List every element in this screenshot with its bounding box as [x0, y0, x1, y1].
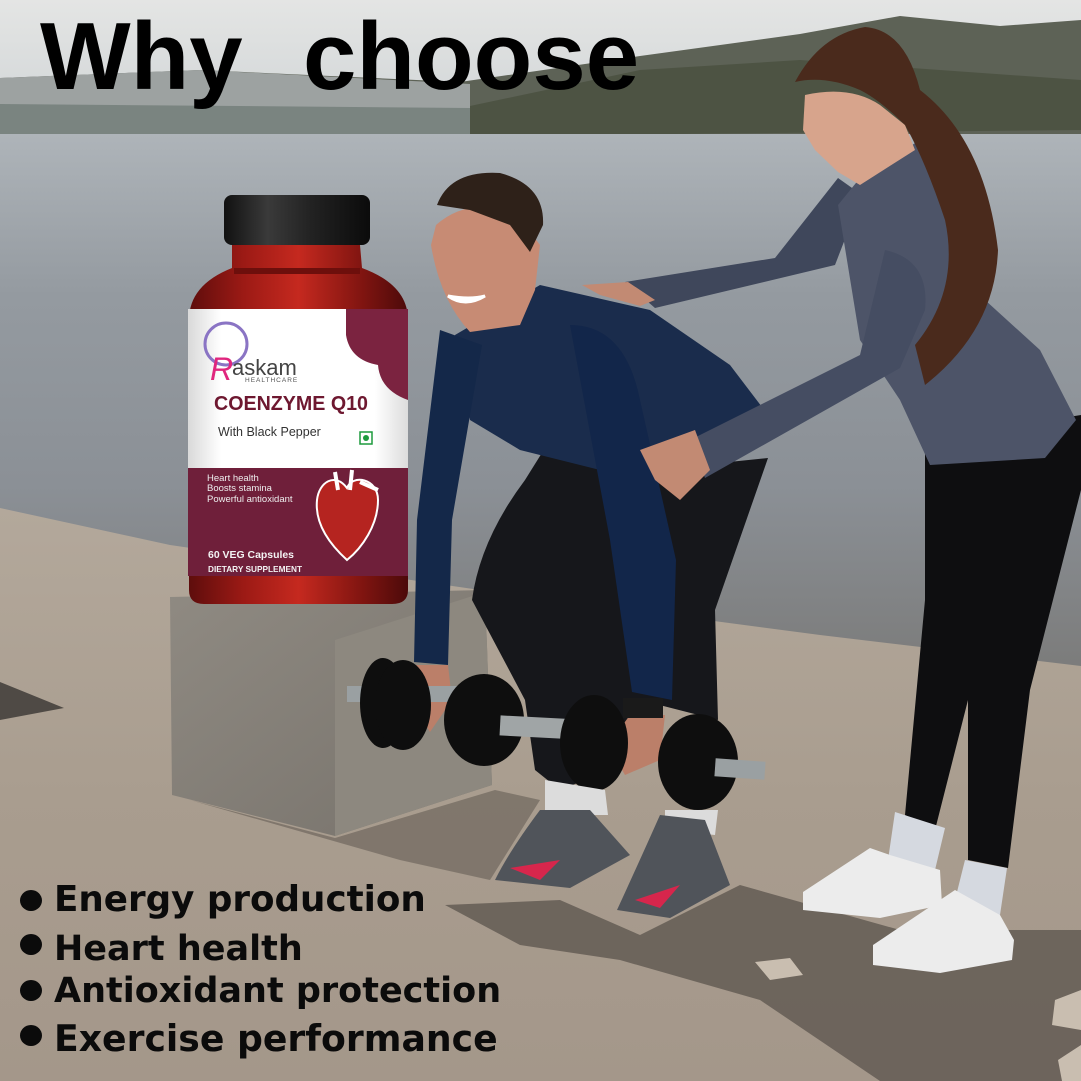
man hands: [410, 665, 665, 775]
man hair: [437, 173, 543, 252]
concrete block: [170, 590, 492, 836]
veg mark: [360, 432, 372, 444]
product bottle: [188, 195, 408, 604]
benefits on label: Powerful antioxidant: [207, 494, 293, 505]
icon: heart: [317, 470, 378, 560]
bottle body: [189, 245, 408, 604]
brand subline: HEALTHCARE: [245, 377, 298, 384]
bottle cap: [224, 195, 370, 245]
dumbbells: [347, 658, 766, 810]
man exercising: [410, 173, 768, 790]
benefits on label: [207, 473, 293, 505]
product name: COENZYME Q10: [214, 392, 368, 415]
man legs: [472, 448, 768, 790]
distant hills: [0, 16, 1081, 136]
woman rear arm: [625, 178, 862, 308]
benefits on label: Boosts stamina: [207, 483, 273, 494]
woman hair and ponytail: [795, 27, 998, 385]
bullet 1: Energy production: [54, 879, 426, 920]
bottle neck ring: [234, 268, 360, 274]
title: choose: [303, 3, 639, 110]
man smile: [448, 296, 485, 302]
product subtitle: With Black Pepper: [218, 425, 321, 439]
ground shadows: [0, 682, 1081, 1081]
bullet 3: Antioxidant protection: [54, 971, 501, 1011]
man arm left: [414, 330, 482, 665]
title: [40, 3, 639, 110]
label lower band: [188, 468, 408, 576]
woman socks: [888, 812, 1007, 915]
concrete ground: [0, 508, 1081, 1081]
woman head: [803, 92, 915, 185]
woman trainer: [582, 27, 1081, 973]
man head: [431, 207, 540, 332]
woman front arm: [690, 250, 926, 478]
woman hands: [582, 282, 710, 500]
brand name remainder: askam: [232, 355, 297, 380]
woman torso: [838, 140, 1076, 465]
brand logo swirl: [205, 323, 247, 365]
sky: [0, 0, 1081, 140]
dietary supplement: DIETARY SUPPLEMENT: [208, 564, 303, 574]
label decorative shape: [346, 309, 408, 400]
man torso: [455, 285, 768, 470]
man watch: [623, 698, 663, 718]
title: Why: [40, 3, 243, 110]
benefits list: [20, 879, 501, 1060]
man shoes: [495, 780, 730, 918]
woman legs: [905, 415, 1081, 868]
woman shoes: [803, 848, 942, 918]
bullet 2: Heart health: [54, 929, 303, 969]
bottle label, upper white: [188, 309, 408, 469]
bullet 4: Exercise performance: [54, 1017, 498, 1060]
benefits on label: Heart health: [207, 473, 259, 484]
water: [0, 134, 1081, 674]
capsule count: 60 VEG Capsules: [208, 549, 294, 561]
man arm right: [570, 325, 676, 700]
brand name: R: [210, 351, 233, 387]
